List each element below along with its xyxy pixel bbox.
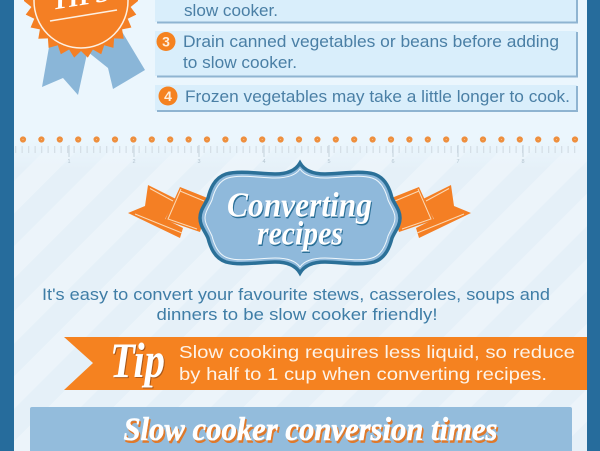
ruler: 1: [67, 159, 71, 165]
tip box 3: Drain canned vegetables or beans before adding: [183, 32, 559, 51]
intro text: dinners to be slow cooker friendly!: [156, 305, 438, 324]
plaque: [200, 163, 400, 273]
orange dotted line: [21, 138, 577, 141]
heading plaque: converting recipes: Converting: [228, 187, 373, 226]
tip banner: Slow cooking requires less liquid, so reduce: [179, 342, 575, 362]
tip banner: [64, 332, 587, 390]
heading plaque: converting recipes: [128, 163, 471, 273]
ruler: 8: [521, 159, 525, 165]
tip banner: Tip: [111, 333, 166, 389]
tip box 2: slow cooker.: [184, 1, 278, 20]
conversion times panel: Slow cooker conversion times: [125, 414, 499, 450]
intro text: [42, 285, 550, 324]
ruler: 2: [132, 159, 136, 165]
heading plaque: converting recipes: recipes: [257, 216, 343, 252]
ruler: 3: [197, 159, 201, 165]
ruler: 4: [262, 159, 266, 165]
number 4: 4: [164, 88, 172, 104]
ruler: 5: [327, 159, 331, 165]
intro text: It's easy to convert your favourite stews, casseroles, soups and: [42, 285, 550, 304]
tip box 3: to slow cooker.: [183, 53, 297, 72]
number 3: [156, 32, 176, 51]
heading plaque: converting recipes: Converting: [227, 186, 372, 224]
tips rosette badge: [24, 0, 145, 95]
tip banner: Tip: [110, 332, 165, 388]
number 4: [158, 86, 178, 106]
badge ribbons: [42, 25, 145, 95]
heading plaque: converting recipes: recipes: [258, 217, 344, 254]
orange ribbons: [128, 185, 471, 238]
conversion times panel: [30, 407, 572, 451]
tip box 3: [155, 31, 577, 76]
tip box 2: [155, 0, 577, 22]
tip box 4: Frozen vegetables may take a little longer to cook.: [185, 87, 570, 106]
tip banner: by half to 1 cup when converting recipes.: [179, 364, 547, 384]
conversion times panel: Slow cooker conversion times: [124, 412, 498, 448]
ruler: 6: [391, 159, 395, 165]
ruler: 7: [456, 159, 460, 165]
tip box 4: [155, 85, 577, 111]
ruler: [15, 145, 580, 165]
number 3: 3: [162, 34, 170, 50]
